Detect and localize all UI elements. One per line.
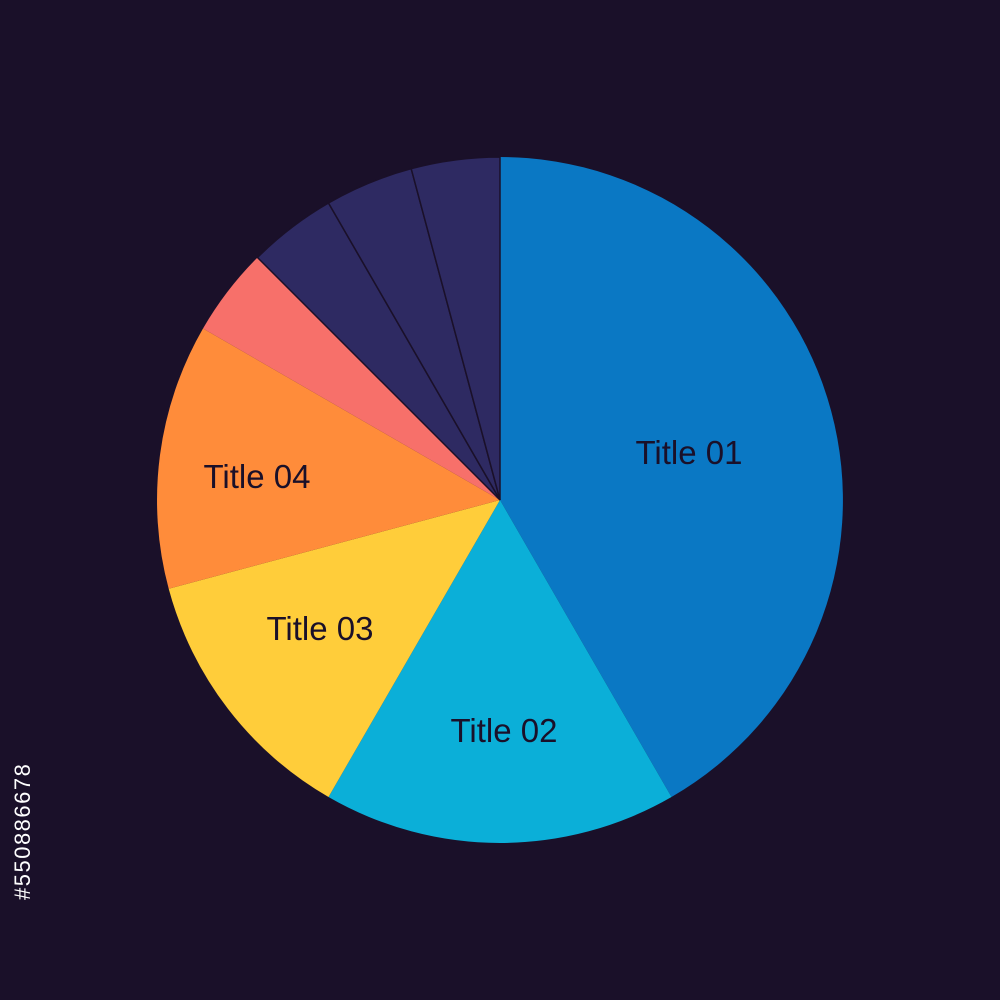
slice: dark 3: [411, 157, 500, 500]
label: Title 04: Title 04: [204, 458, 310, 495]
slice: Title 01: [500, 157, 843, 797]
slice: dark 1: [258, 203, 500, 500]
slice: Title 02: [328, 500, 672, 843]
label: Title 03: Title 03: [266, 610, 374, 647]
label: Title 02: Title 02: [450, 712, 558, 749]
slice: Title 04: [157, 328, 500, 589]
slice: salmon: [203, 258, 500, 500]
side id text: #550886678: [10, 763, 35, 900]
slice: dark 2: [328, 169, 500, 500]
slice: Title 03: [169, 500, 500, 797]
pie chart: [157, 157, 843, 843]
label: Title 01: Title 01: [636, 434, 742, 471]
